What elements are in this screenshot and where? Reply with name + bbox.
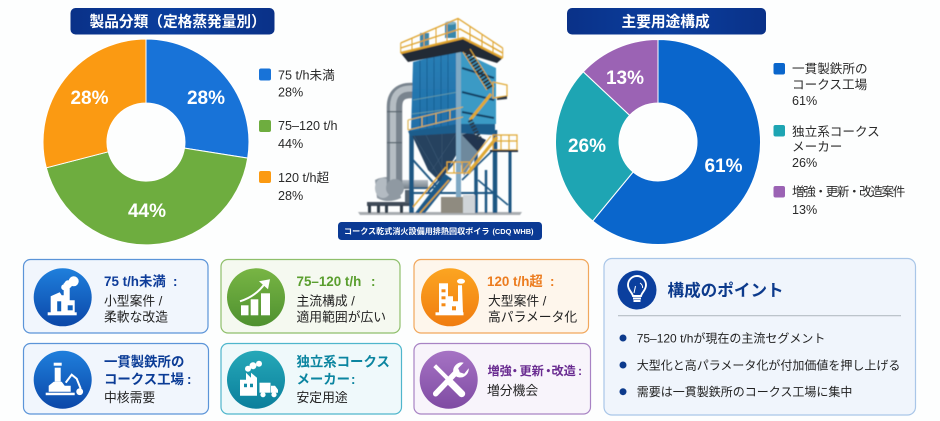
icon: small factory bbox=[34, 268, 92, 326]
list: key points: 大型化と高パラメータ化が付加価値を押し上げる bbox=[637, 358, 900, 372]
legend: product classification: 75 t/h未満 bbox=[278, 68, 335, 82]
text: integrated coke plants bbox=[104, 354, 191, 405]
hopper bbox=[408, 123, 495, 182]
text: expansion, renewal, revamp: 更新 bbox=[520, 363, 544, 378]
text: integrated coke plants: 一貫製鉄所の bbox=[104, 354, 184, 370]
donut labels: main applications: 26% bbox=[568, 136, 606, 157]
legend: product classification bbox=[259, 68, 338, 203]
top deck, tanks and railing bbox=[401, 18, 503, 63]
icon: coke plant with crane bbox=[34, 351, 92, 409]
donut chart: main applications bbox=[555, 40, 761, 244]
legend: main applications: メーカー bbox=[792, 140, 842, 154]
columns and bracing bbox=[412, 130, 510, 213]
icon: light bulb bbox=[618, 270, 656, 310]
text: under 75 t/h: 75 t/h未満 bbox=[104, 274, 166, 289]
donut labels: main applications: 13% bbox=[606, 68, 644, 89]
legend: main applications bbox=[774, 62, 905, 217]
legend: main applications: 増強・更新・改造案件 bbox=[792, 185, 905, 199]
card: under 75 t/h bbox=[24, 260, 208, 333]
slice: 75-120 t/h 44% bbox=[46, 148, 248, 245]
text: expansion, renewal, revamp: 増分機会 bbox=[487, 383, 538, 398]
text: integrated coke plants: 中核需要 bbox=[104, 390, 155, 405]
text: expansion, renewal, revamp bbox=[487, 363, 582, 398]
heading: key points: 構成のポイント bbox=[668, 280, 784, 300]
text: 75-120 t/h: 適用範囲が広い bbox=[296, 310, 386, 324]
text: over 120 t/h: 高パラメータ化 bbox=[488, 310, 577, 324]
icon: wrench and screwdriver bbox=[420, 351, 478, 409]
legend: main applications: 13% bbox=[792, 203, 817, 217]
card: independent coke makers bbox=[221, 344, 402, 414]
heading: main applications bbox=[567, 8, 766, 34]
donut chart: product classification bbox=[43, 39, 249, 245]
text: integrated coke plants: コークス工場 bbox=[104, 372, 184, 387]
text: independent coke makers: 安定用途 bbox=[296, 390, 348, 405]
ground slab bbox=[358, 212, 522, 215]
text: independent coke makers: 独立系コークス bbox=[296, 354, 390, 370]
legend: product classification: 120 t/h超 bbox=[278, 171, 330, 185]
text: over 120 t/h: : bbox=[550, 274, 554, 289]
mid gallery railing bbox=[408, 107, 463, 130]
donut labels: product classification: 28% bbox=[187, 88, 225, 109]
text: integrated coke plants: : bbox=[187, 372, 191, 387]
slice: under 75 t/h 28% bbox=[146, 39, 249, 158]
list: key points bbox=[620, 330, 900, 399]
icon: large plant bbox=[421, 268, 479, 326]
text: independent coke makers: : bbox=[351, 372, 355, 387]
card: integrated coke plants bbox=[24, 344, 208, 414]
donut labels: main applications bbox=[568, 68, 743, 177]
silver riser pipe bbox=[386, 88, 421, 197]
lower stairs and platforms bbox=[413, 120, 518, 213]
text: under 75 t/h bbox=[104, 273, 177, 324]
boiler casing bbox=[411, 50, 496, 213]
legend: main applications: コークス工場 bbox=[792, 78, 868, 92]
donut labels: product classification: 44% bbox=[128, 201, 166, 222]
text: expansion, renewal, revamp: : bbox=[578, 364, 582, 378]
panel: key points bbox=[604, 258, 916, 415]
legend: main applications: 61% bbox=[792, 94, 817, 108]
legend: product classification: 28% bbox=[278, 86, 303, 100]
slice: expansion and revamp 13% bbox=[583, 40, 658, 115]
slice: integrated steelworks 61% bbox=[593, 40, 761, 244]
legend: main applications: 一貫製鉄所の bbox=[792, 62, 868, 76]
donut labels: product classification bbox=[70, 88, 225, 222]
slice: independent coke makers 26% bbox=[555, 72, 633, 221]
caption: boiler name bbox=[338, 222, 542, 240]
card: expansion, renewal, revamp bbox=[414, 344, 590, 414]
card: 75-120 t/h bbox=[221, 260, 400, 333]
heading: product classification: 製品分類（定格蒸発量別） bbox=[90, 12, 266, 30]
text: under 75 t/h: 柔軟な改造 bbox=[104, 310, 168, 324]
donut labels: product classification: 28% bbox=[70, 88, 109, 109]
legend: product classification: 28% bbox=[278, 189, 303, 203]
caption: boiler name: コークス乾式消火設備用排熱回収ボイラ (CDQ WHB) bbox=[344, 226, 534, 236]
icon: factory with truck bbox=[227, 351, 285, 409]
text: expansion, renewal, revamp: 増強 bbox=[488, 364, 512, 378]
text: expansion, renewal, revamp: 改造 bbox=[552, 363, 576, 378]
legend: main applications: 独立系コークス bbox=[792, 125, 880, 139]
legend: product classification: 44% bbox=[278, 137, 303, 151]
text: independent coke makers bbox=[296, 354, 390, 405]
illustration: CDQ waste heat boiler bbox=[358, 18, 522, 215]
donut labels: main applications: 61% bbox=[704, 156, 743, 177]
text: expansion, renewal, revamp: ・ bbox=[542, 364, 554, 378]
heading: product classification bbox=[70, 8, 274, 34]
text: under 75 t/h: 小型案件 / bbox=[104, 294, 163, 308]
text: 75-120 t/h bbox=[296, 274, 386, 324]
text: independent coke makers: メーカー bbox=[296, 372, 350, 387]
text: over 120 t/h: 120 t/h超 bbox=[487, 274, 543, 289]
text: under 75 t/h: : bbox=[173, 274, 177, 289]
card: over 120 t/h bbox=[414, 260, 588, 333]
upper stairs bbox=[463, 49, 507, 120]
text: expansion, renewal, revamp: ・ bbox=[509, 364, 521, 378]
legend: main applications: 26% bbox=[792, 156, 817, 170]
heading: main applications: 主要用途構成 bbox=[622, 12, 710, 30]
list: key points: 75–120 t/hが現在の主流セグメント bbox=[637, 330, 825, 346]
text: over 120 t/h: 大型案件 / bbox=[488, 294, 547, 308]
equipment box bbox=[441, 195, 475, 213]
skid and fan bbox=[367, 177, 428, 213]
list: key points: 需要は一貫製鉄所のコークス工場に集中 bbox=[637, 384, 852, 399]
icon: growth chart bbox=[227, 268, 285, 326]
text: 75-120 t/h: 75–120 t/h bbox=[296, 274, 361, 289]
text: 75-120 t/h: 主流構成 / bbox=[296, 294, 355, 308]
legend: product classification: 75–120 t/h bbox=[278, 119, 338, 133]
text: over 120 t/h bbox=[487, 274, 577, 324]
slice: over 120 t/h 28% bbox=[43, 39, 146, 168]
text: 75-120 t/h: : bbox=[371, 274, 375, 289]
